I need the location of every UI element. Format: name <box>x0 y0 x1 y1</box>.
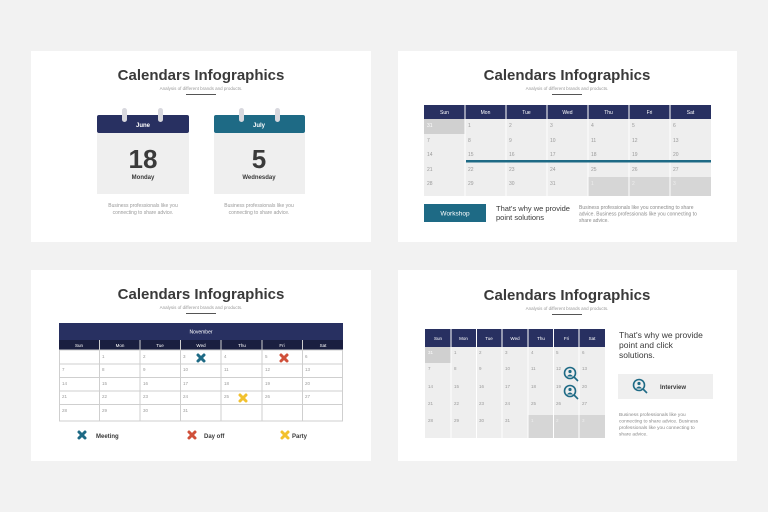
title: Calendars Infographics <box>118 286 284 303</box>
month calendar: Tue <box>485 336 493 341</box>
button: workshop: Workshop <box>440 210 470 218</box>
month calendar: 31 <box>427 123 433 129</box>
month calendar: Sat <box>589 336 596 341</box>
month calendar: Fri <box>647 110 652 116</box>
month calendar: 30 <box>509 181 515 187</box>
card: June 18: Monday <box>132 175 155 181</box>
month calendar: 4 <box>531 350 534 355</box>
month calendar: 7 <box>428 366 431 371</box>
month calendar: Sat <box>687 110 695 116</box>
month calendar: 26 <box>632 167 638 173</box>
month calendar: 10 <box>550 138 556 144</box>
heading: point and click: solutions. <box>619 350 655 360</box>
card: July 5: Wednesday <box>242 175 276 181</box>
heading: point and click: point and click <box>619 340 674 350</box>
month calendar: 15 <box>468 152 474 158</box>
month calendar: 29 <box>102 408 108 413</box>
button: workshop <box>424 204 486 222</box>
month calendar: 31 <box>505 418 511 423</box>
month calendar: 9 <box>509 138 512 144</box>
card: June 18 <box>97 108 189 194</box>
month calendar: 25 <box>531 401 537 406</box>
month calendar: 1 <box>102 354 105 359</box>
title: Calendars Infographics <box>484 287 650 304</box>
month calendar: 26 <box>265 394 271 399</box>
month calendar: 9 <box>143 367 146 372</box>
month calendar: 8 <box>468 138 471 144</box>
month calendar: 5 <box>556 350 559 355</box>
subtitle: Analysis of different brands and products. <box>526 86 608 91</box>
panel: November calendar <box>31 270 371 461</box>
heading: point and click <box>619 330 703 360</box>
month calendar: 15 <box>454 384 460 389</box>
month calendar: 1 <box>468 123 471 129</box>
month calendar: 18 <box>591 152 597 158</box>
icon: meeting mark <box>198 355 204 361</box>
month calendar: Sun <box>434 336 442 341</box>
month calendar: 30 <box>143 408 149 413</box>
subtitle: Analysis of different brands and products. <box>526 306 608 311</box>
month calendar: 22 <box>468 167 474 173</box>
month calendar: 23 <box>509 167 515 173</box>
icon: interview marker 12 <box>564 368 578 381</box>
month calendar: 19 <box>632 152 638 158</box>
month calendar: 18 <box>531 384 537 389</box>
month calendar: 22 <box>454 401 460 406</box>
month calendar: 3 <box>183 354 186 359</box>
heading: point solutions: point solutions <box>496 213 544 222</box>
month calendar: Wed <box>510 336 520 341</box>
month calendar: 17 <box>183 381 189 386</box>
month calendar: 3 <box>505 350 508 355</box>
subtitle: Analysis of different brands and products. <box>160 305 242 310</box>
month calendar: 13 <box>305 367 311 372</box>
month calendar: 26 <box>556 401 562 406</box>
month calendar: 2 <box>509 123 512 129</box>
month calendar: 29 <box>454 418 460 423</box>
month calendar: 1 <box>531 418 534 423</box>
month calendar: 8 <box>454 366 457 371</box>
month calendar: 11 <box>224 367 229 372</box>
legend: Day off <box>204 434 225 440</box>
month calendar: 19 <box>556 384 562 389</box>
heading: point solutions <box>496 204 570 222</box>
month calendar <box>425 329 605 438</box>
month calendar: 8 <box>102 367 105 372</box>
month calendar: 17 <box>550 152 556 158</box>
month calendar: 12 <box>632 138 638 144</box>
month calendar: 12 <box>265 367 271 372</box>
month calendar: 24 <box>505 401 511 406</box>
month calendar: Fri <box>279 343 285 348</box>
month calendar: 16 <box>479 384 485 389</box>
month calendar: 12 <box>556 366 562 371</box>
month calendar: 2 <box>556 418 559 423</box>
month calendar: November <box>189 330 213 336</box>
month calendar: 1 <box>454 350 457 355</box>
month calendar: 2 <box>479 350 482 355</box>
month calendar: 28 <box>427 181 433 187</box>
month calendar: 21 <box>427 167 433 173</box>
month calendar: 27 <box>673 167 679 173</box>
month calendar <box>424 105 711 196</box>
month calendar: 31 <box>183 408 189 413</box>
month calendar: 16 <box>143 381 149 386</box>
month calendar: 22 <box>102 394 108 399</box>
legend <box>79 432 308 440</box>
month calendar <box>59 323 343 421</box>
month calendar: 6 <box>673 123 676 129</box>
panel: workshop calendar <box>398 51 737 242</box>
month calendar: Sat <box>320 343 327 348</box>
text block: professionals like you connecting to <box>619 425 695 431</box>
month calendar: 31 <box>550 181 556 187</box>
month calendar: 21 <box>428 401 434 406</box>
month calendar: Wed <box>562 110 573 116</box>
month calendar: 17 <box>505 384 511 389</box>
month calendar: 11 <box>531 366 536 371</box>
panel: two date cards <box>31 51 371 242</box>
month calendar: 14 <box>62 381 68 386</box>
month calendar: 6 <box>305 354 308 359</box>
month calendar: 29 <box>468 181 474 187</box>
event bar <box>466 160 711 162</box>
month calendar: Mon <box>481 110 491 116</box>
panel: interview calendar <box>398 270 737 461</box>
text: card notes <box>108 203 294 216</box>
month calendar: 25 <box>591 167 597 173</box>
month calendar: 16 <box>509 152 515 158</box>
month calendar: 4 <box>224 354 227 359</box>
month calendar: Mon <box>459 336 468 341</box>
month calendar: 24 <box>550 167 556 173</box>
text: card notes: Business professionals like you <box>108 203 178 209</box>
month calendar: Tue <box>156 343 164 348</box>
month calendar: 10 <box>505 366 511 371</box>
month calendar: 20 <box>305 381 311 386</box>
month calendar: 5 <box>265 354 268 359</box>
card: July 5 <box>214 108 305 194</box>
month calendar: 24 <box>183 394 189 399</box>
box: interview <box>618 374 713 399</box>
month calendar: Mon <box>116 343 125 348</box>
legend: Meeting <box>96 434 119 440</box>
box: interview: Interview <box>660 385 686 391</box>
month calendar: 19 <box>265 381 271 386</box>
text block: connecting to share advice. Business <box>619 418 699 424</box>
month calendar: 18 <box>224 381 230 386</box>
text block: advice. Business professionals like you connecting to <box>579 212 697 218</box>
month calendar: Thu <box>604 110 613 116</box>
card: July 5: July <box>253 123 266 129</box>
month calendar: 27 <box>582 401 588 406</box>
icon: day off mark <box>281 355 287 361</box>
month calendar: 3 <box>673 181 676 187</box>
month calendar: Wed <box>196 343 206 348</box>
month calendar: 28 <box>428 418 434 423</box>
month calendar: 2 <box>632 181 635 187</box>
text: card notes: connecting to share advice. <box>113 210 173 216</box>
month calendar: 2 <box>143 354 146 359</box>
heading: point solutions: That's why we provide <box>496 204 570 213</box>
icon: party mark <box>240 395 246 401</box>
card: June 18: 18 <box>129 144 157 174</box>
text block <box>619 412 699 438</box>
text: card notes: Business professionals like you <box>224 203 294 209</box>
card: June 18: June <box>136 123 151 129</box>
month calendar: 21 <box>62 394 68 399</box>
month calendar: 20 <box>582 384 588 389</box>
month calendar: 15 <box>102 381 108 386</box>
month calendar: 10 <box>183 367 189 372</box>
month calendar: 14 <box>428 384 434 389</box>
legend: Party <box>292 434 308 440</box>
month calendar: 7 <box>427 138 430 144</box>
text block <box>579 205 697 224</box>
month calendar: Sun <box>75 343 83 348</box>
month calendar: 27 <box>305 394 311 399</box>
month calendar: 7 <box>62 367 65 372</box>
text: card notes: connecting to share advice. <box>229 210 289 216</box>
text block: Business professionals like you connecting to share <box>579 205 694 211</box>
month calendar: 20 <box>673 152 679 158</box>
month calendar: 1 <box>591 181 594 187</box>
month calendar: 25 <box>224 394 230 399</box>
month calendar: 30 <box>479 418 485 423</box>
month calendar: 9 <box>479 366 482 371</box>
month calendar: 23 <box>479 401 485 406</box>
card: July 5: 5 <box>252 144 266 174</box>
icon: interview marker 19 <box>564 386 578 399</box>
month calendar: 14 <box>427 152 433 158</box>
month calendar: 31 <box>428 350 434 355</box>
month calendar: 4 <box>591 123 594 129</box>
heading: point and click: That's why we provide <box>619 330 703 340</box>
month calendar: 3 <box>582 418 585 423</box>
month calendar: 28 <box>62 408 68 413</box>
subtitle: Analysis of different brands and products. <box>160 86 242 91</box>
month calendar: 23 <box>143 394 149 399</box>
month calendar: 11 <box>591 138 596 144</box>
month calendar: Sun <box>440 110 449 116</box>
month calendar: 13 <box>673 138 679 144</box>
month calendar: Tue <box>522 110 531 116</box>
month calendar: Fri <box>564 336 569 341</box>
text block: Business professionals like you <box>619 412 686 418</box>
title: Calendars Infographics <box>118 67 284 84</box>
month calendar: Thu <box>537 336 545 341</box>
month calendar: Thu <box>238 343 246 348</box>
month calendar: 5 <box>632 123 635 129</box>
title: Calendars Infographics <box>484 67 650 84</box>
month calendar: 13 <box>582 366 588 371</box>
text block: share advice. <box>579 218 609 224</box>
month calendar: 3 <box>550 123 553 129</box>
text block: share advice. <box>619 432 648 438</box>
month calendar: 6 <box>582 350 585 355</box>
